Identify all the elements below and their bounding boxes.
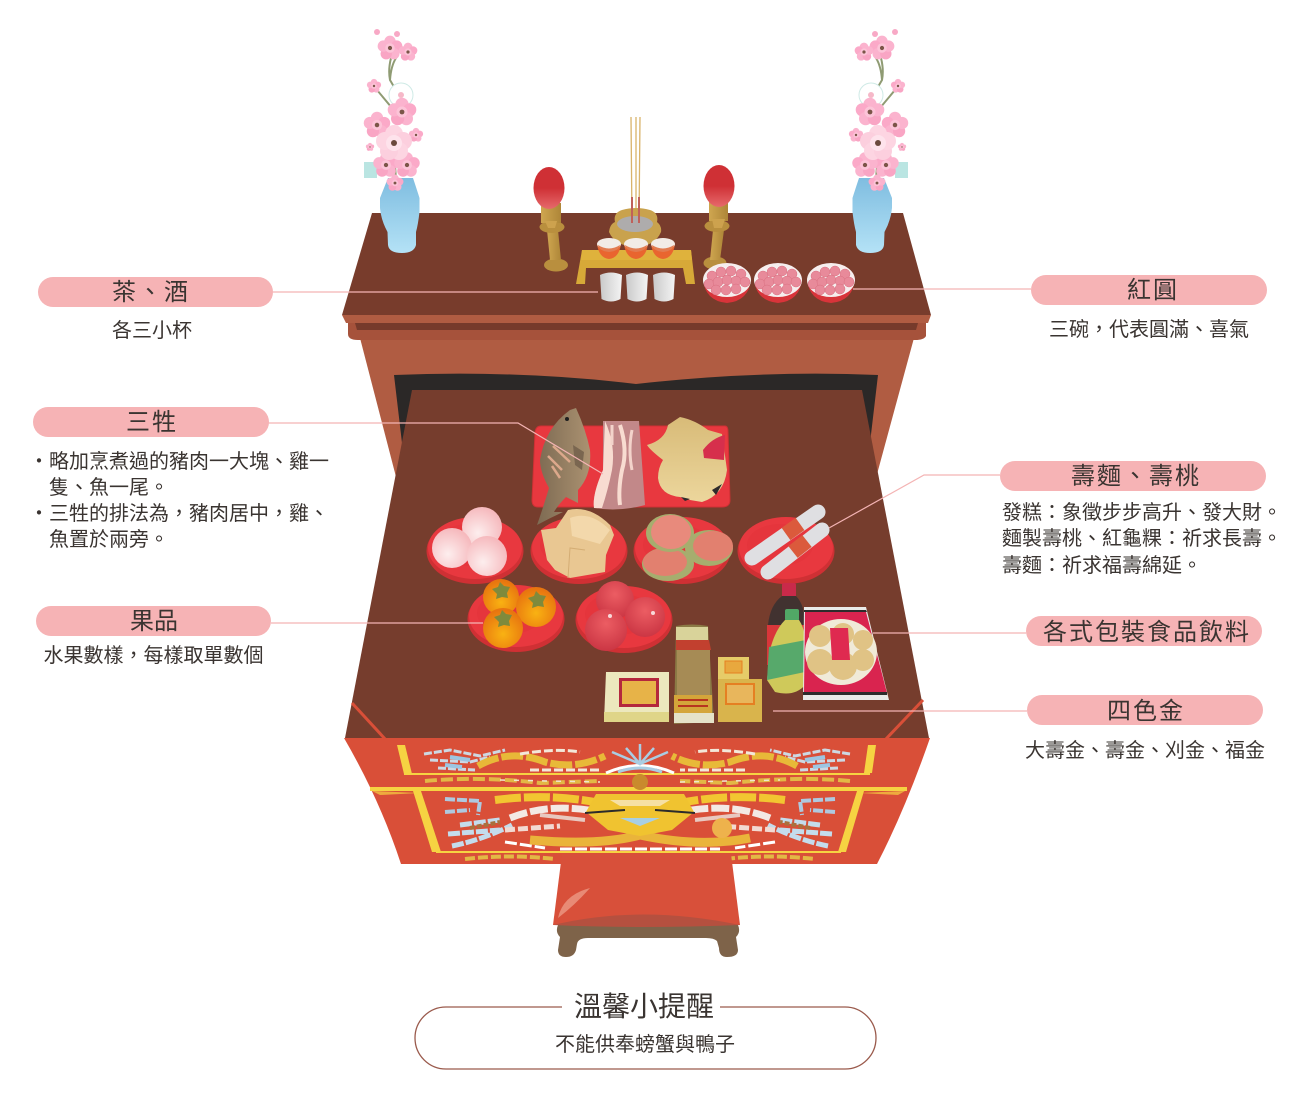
plate: longevity peaches bbox=[426, 507, 524, 584]
kneeling stool bbox=[553, 854, 740, 957]
callout: three sacrifices: ・ bbox=[29, 503, 49, 525]
snack package bbox=[803, 607, 889, 700]
left candlestick bbox=[534, 167, 568, 272]
leader lines bbox=[268, 289, 1031, 711]
tray bbox=[532, 426, 730, 507]
plates of fruit bbox=[468, 579, 672, 653]
table top lip bbox=[342, 315, 931, 323]
callout: three sacrifices bbox=[29, 407, 329, 551]
row of plates: peach, tofu, cakes, rolls bbox=[426, 507, 834, 584]
cushion bbox=[553, 854, 740, 925]
callout: three sacrifices: 三牲 bbox=[126, 409, 178, 436]
callout: three sacrifices: 魚置於兩旁。 bbox=[49, 528, 169, 551]
big longevity gold box bbox=[604, 672, 669, 722]
callout: three sacrifices: 三牲的排法為，豬肉居中，雞、 bbox=[49, 502, 329, 525]
incense burner bbox=[609, 117, 661, 247]
plate: persimmons bbox=[468, 579, 564, 652]
fish bbox=[537, 408, 590, 525]
stool legs bbox=[557, 925, 739, 957]
plate: longevity noodles bbox=[738, 512, 834, 584]
right vase bbox=[852, 178, 892, 253]
right candlestick bbox=[704, 165, 734, 270]
callout: four-colour gold bbox=[1025, 695, 1265, 762]
gold trim bbox=[370, 745, 907, 853]
upper dragons embroidery bbox=[424, 744, 850, 790]
under-shelf bbox=[348, 323, 926, 340]
plate: red turtle cakes bbox=[634, 514, 733, 584]
green tea bottle bbox=[767, 609, 806, 693]
small yellow gold stack bbox=[718, 657, 762, 722]
callout: red dumplings: 紅圓 bbox=[1127, 277, 1179, 304]
callout: red dumplings: 三碗，代表圓滿、喜氣 bbox=[1049, 318, 1249, 341]
main dragon embroidery bbox=[445, 794, 835, 859]
reminder box: 不能供奉螃蟹與鴨子 bbox=[555, 1033, 735, 1056]
callout: fruit: 果品 bbox=[130, 608, 178, 635]
black curtain behind runner bbox=[394, 374, 878, 460]
callout: tea and wine bbox=[38, 277, 273, 342]
callout: tea and wine: 各三小杯 bbox=[112, 319, 192, 342]
callout: three sacrifices: ・ bbox=[29, 451, 49, 473]
callout: longevity noodles and peaches bbox=[1000, 461, 1282, 577]
left blossom bbox=[364, 29, 423, 191]
red round dumpling bowls bbox=[703, 263, 855, 303]
callout: red dumplings bbox=[1031, 275, 1267, 341]
white wine cups bbox=[600, 272, 675, 302]
candlesticks bbox=[534, 165, 734, 272]
right blossom bbox=[849, 29, 908, 191]
plate: rice cake bbox=[530, 509, 628, 584]
left vase bbox=[380, 178, 420, 253]
cloth panel bbox=[344, 738, 930, 864]
callout: longevity noodles and peaches: 壽麵：祈求福壽綿延。 bbox=[1002, 554, 1202, 577]
vases with blossoms bbox=[364, 29, 908, 253]
callout: four-colour gold: 四色金 bbox=[1107, 698, 1185, 725]
pork belly bbox=[594, 421, 645, 509]
front runner cloth bbox=[345, 390, 929, 740]
table top bbox=[342, 213, 931, 315]
gold offering stand with tea cups bbox=[576, 238, 695, 284]
plate: apples bbox=[576, 581, 672, 653]
callout: packaged food and drink: 各式包裝食品飲料 bbox=[1043, 619, 1251, 646]
callout: longevity noodles and peaches: 發糕：象徵步步高升、發大財。 bbox=[1002, 501, 1282, 524]
four-colour gold paper bbox=[604, 624, 762, 724]
cola bottle bbox=[767, 583, 805, 675]
callout: longevity noodles and peaches: 壽麵、壽桃 bbox=[1071, 463, 1201, 490]
reminder box: 溫馨小提醒 bbox=[574, 991, 714, 1022]
callout: longevity noodles and peaches: 麵製壽桃、紅龜粿：祈求長壽。 bbox=[1002, 527, 1282, 550]
altar table bbox=[342, 213, 931, 500]
reminder box bbox=[415, 991, 876, 1069]
callout: fruit: 水果數樣，每樣取單數個 bbox=[44, 644, 264, 667]
callout: four-colour gold: 大壽金、壽金、刈金、福金 bbox=[1025, 739, 1265, 762]
callout: tea and wine: 茶、酒 bbox=[112, 279, 190, 306]
chicken bbox=[647, 417, 727, 502]
three sacrifices tray bbox=[532, 408, 730, 525]
callout: fruit bbox=[36, 606, 271, 667]
embroidered altar cloth bbox=[344, 738, 930, 864]
table body bbox=[360, 338, 914, 500]
gold paper roll bbox=[674, 624, 714, 724]
packaged drinks and snacks bbox=[767, 583, 889, 700]
callout: three sacrifices: 略加烹煮過的豬肉一大塊、雞一 bbox=[49, 450, 329, 473]
callout: three sacrifices: 隻、魚一尾。 bbox=[49, 476, 169, 499]
